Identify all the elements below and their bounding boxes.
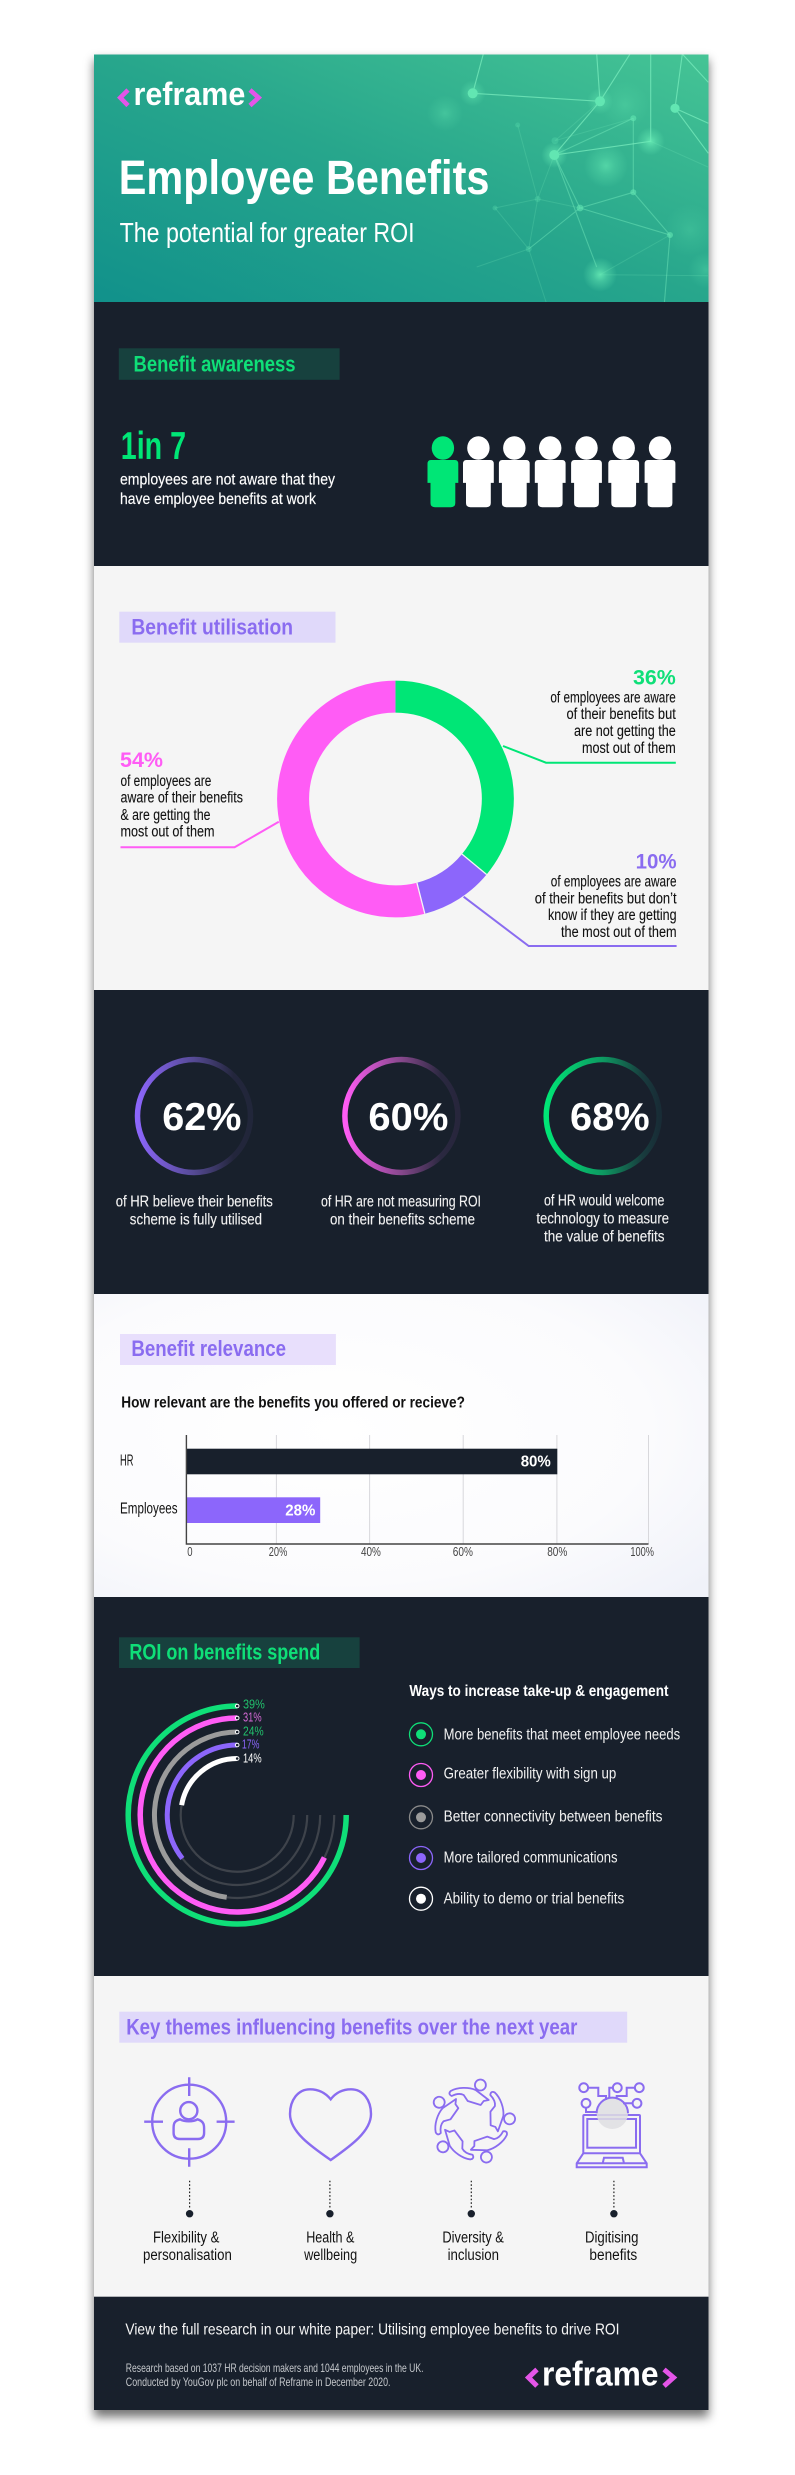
bar chart: 0 [187,1545,193,1559]
bar chart: 80% [521,1454,551,1471]
callout: 10%: know if they are getting [548,907,677,924]
callout: 10%: of employees are aware [551,873,677,890]
stat ring: 62%: of HR believe their benefits [116,1194,273,1211]
icon: ring of people [424,2080,517,2169]
panel: footer [94,2297,708,2410]
network background [427,54,724,304]
bar chart: HR [120,1453,133,1470]
section label: Key themes: Key themes influencing benefits over the next year [126,2014,578,2039]
bar chart: 80% [547,1545,567,1559]
white paper call to action: View the full research in our white paper: Utilising employee benefits to drive ROI [125,2321,620,2338]
callout: 36%: 36% [633,666,676,689]
theme: flexibility and personalisation: Flexibility & [153,2230,220,2247]
icon: target with person [144,2077,235,2167]
list heading: Ways to increase take-up & engagement [409,1683,669,1700]
panel: key themes [94,1976,708,2297]
callout: 36%: of their benefits but [566,706,676,723]
icon: heart [290,2089,371,2160]
legend list: More benefits that meet employee needs [444,1726,680,1743]
theme: diversity and inclusion [424,2080,517,2264]
stat description: employees are not aware that they [120,472,335,489]
legend list: Better connectivity between benefits [444,1809,663,1826]
section label: ROI on benefits spend: ROI on benefits spend [129,1639,320,1664]
stat ring: 68% [536,1060,669,1246]
callout: 10%: 10% [636,850,677,873]
bar chart: 20% [269,1545,287,1559]
theme: diversity and inclusion: inclusion [448,2247,499,2264]
stat ring: 60% [321,1060,481,1228]
panel: benefit awareness [94,302,708,566]
section label: Benefit awareness [119,348,340,380]
section label: Benefit awareness: Benefit awareness [134,351,296,376]
bar chart: 100% [630,1545,654,1559]
callout: 54%: most out of them [120,824,214,841]
callout: 10% [464,850,677,946]
stat description [120,472,335,508]
callout: 36%: are not getting the [574,723,676,740]
legend list: More tailored communications [444,1849,618,1866]
radial bar chart: 24% [243,1724,264,1739]
page shadow [94,60,708,2417]
stat ring: 62%: scheme is fully utilised [130,1211,262,1228]
theme: health and wellbeing: wellbeing [303,2247,357,2264]
theme: flexibility and personalisation: personalisation [143,2247,232,2264]
research note [126,2361,424,2389]
theme: digitising benefits [577,2083,647,2264]
section label: Benefit relevance [120,1334,336,1365]
theme: diversity and inclusion: Diversity & [442,2230,504,2247]
panel: ROI on benefits spend [94,1597,708,1976]
radial bar chart: 14% [243,1750,262,1765]
callout: 54%: 54% [120,749,163,772]
callout: 10%: the most out of them [561,924,677,941]
panel: benefit relevance [94,1294,708,1597]
stat ring: 62% [116,1060,273,1228]
section label: Benefit utilisation [119,612,336,643]
callout: 36%: most out of them [582,740,676,757]
bar chart: 40% [361,1545,381,1559]
theme: health and wellbeing: Health & [306,2230,355,2247]
stat ring: 68%: 68% [570,1096,650,1139]
stat ring: 60%: 60% [368,1096,448,1139]
stat ring: 60%: on their benefits scheme [330,1211,475,1228]
callout: 54%: of employees are [120,773,211,790]
icon: laptop with circuit [577,2083,647,2167]
callout: 10%: of their benefits but don’t [535,890,677,907]
legend list: Greater flexibility with sign up [444,1766,616,1783]
stat description: have employee benefits at work [120,491,317,508]
stat ring: 68%: the value of benefits [544,1229,665,1246]
callout: 36% [503,666,676,763]
stat ring: 60%: of HR are not measuring ROI [321,1194,481,1211]
callout: 54%: aware of their benefits [120,790,243,807]
panel: header [94,54,724,304]
subtitle: The potential for greater ROI [120,217,415,248]
panel: benefit utilisation [94,566,708,990]
callout: 36%: of employees are aware [550,689,676,706]
legend list [410,1723,680,1910]
research note: Research based on 1037 HR decision makers and 1044 employees in the UK. [126,2361,424,2375]
research note: Conducted by YouGov plc on behalf of Reframe in December 2020. [126,2375,391,2389]
donut chart [293,697,498,914]
theme: flexibility and personalisation [143,2077,235,2264]
section label: Benefit utilisation: Benefit utilisation [131,614,293,639]
radial bar chart: 17% [242,1736,260,1751]
title: Employee Benefits [119,152,489,205]
legend list: Ability to demo or trial benefits [444,1890,625,1907]
theme: digitising benefits: benefits [589,2247,637,2264]
bar chart: 60% [453,1545,473,1559]
radial bar chart [128,1697,346,1924]
bar chart: Employees [120,1501,178,1518]
stat ring: 62%: 62% [162,1096,242,1139]
stat ring: 68%: of HR would welcome [544,1193,664,1210]
radial bar chart: 31% [243,1709,262,1724]
stat ring: 68%: technology to measure [536,1211,669,1228]
callout: 54%: & are getting the [120,807,210,824]
panel: HR stats [94,990,708,1294]
theme: health and wellbeing [290,2089,371,2264]
chart question: How relevant are the benefits you offered or recieve? [121,1394,465,1411]
radial bar chart: 39% [243,1697,265,1712]
bar chart: 28% [285,1502,315,1519]
section label: Benefit relevance: Benefit relevance [131,1336,286,1361]
logo: reframe: reframe [542,2356,658,2394]
icon: seven people [428,436,675,507]
bar chart [120,1435,654,1559]
theme: digitising benefits: Digitising [585,2230,638,2247]
stat: 1 in 7: 1in 7 [121,425,186,468]
logo: reframe: reframe [134,76,245,112]
callout: 54% [120,749,279,847]
